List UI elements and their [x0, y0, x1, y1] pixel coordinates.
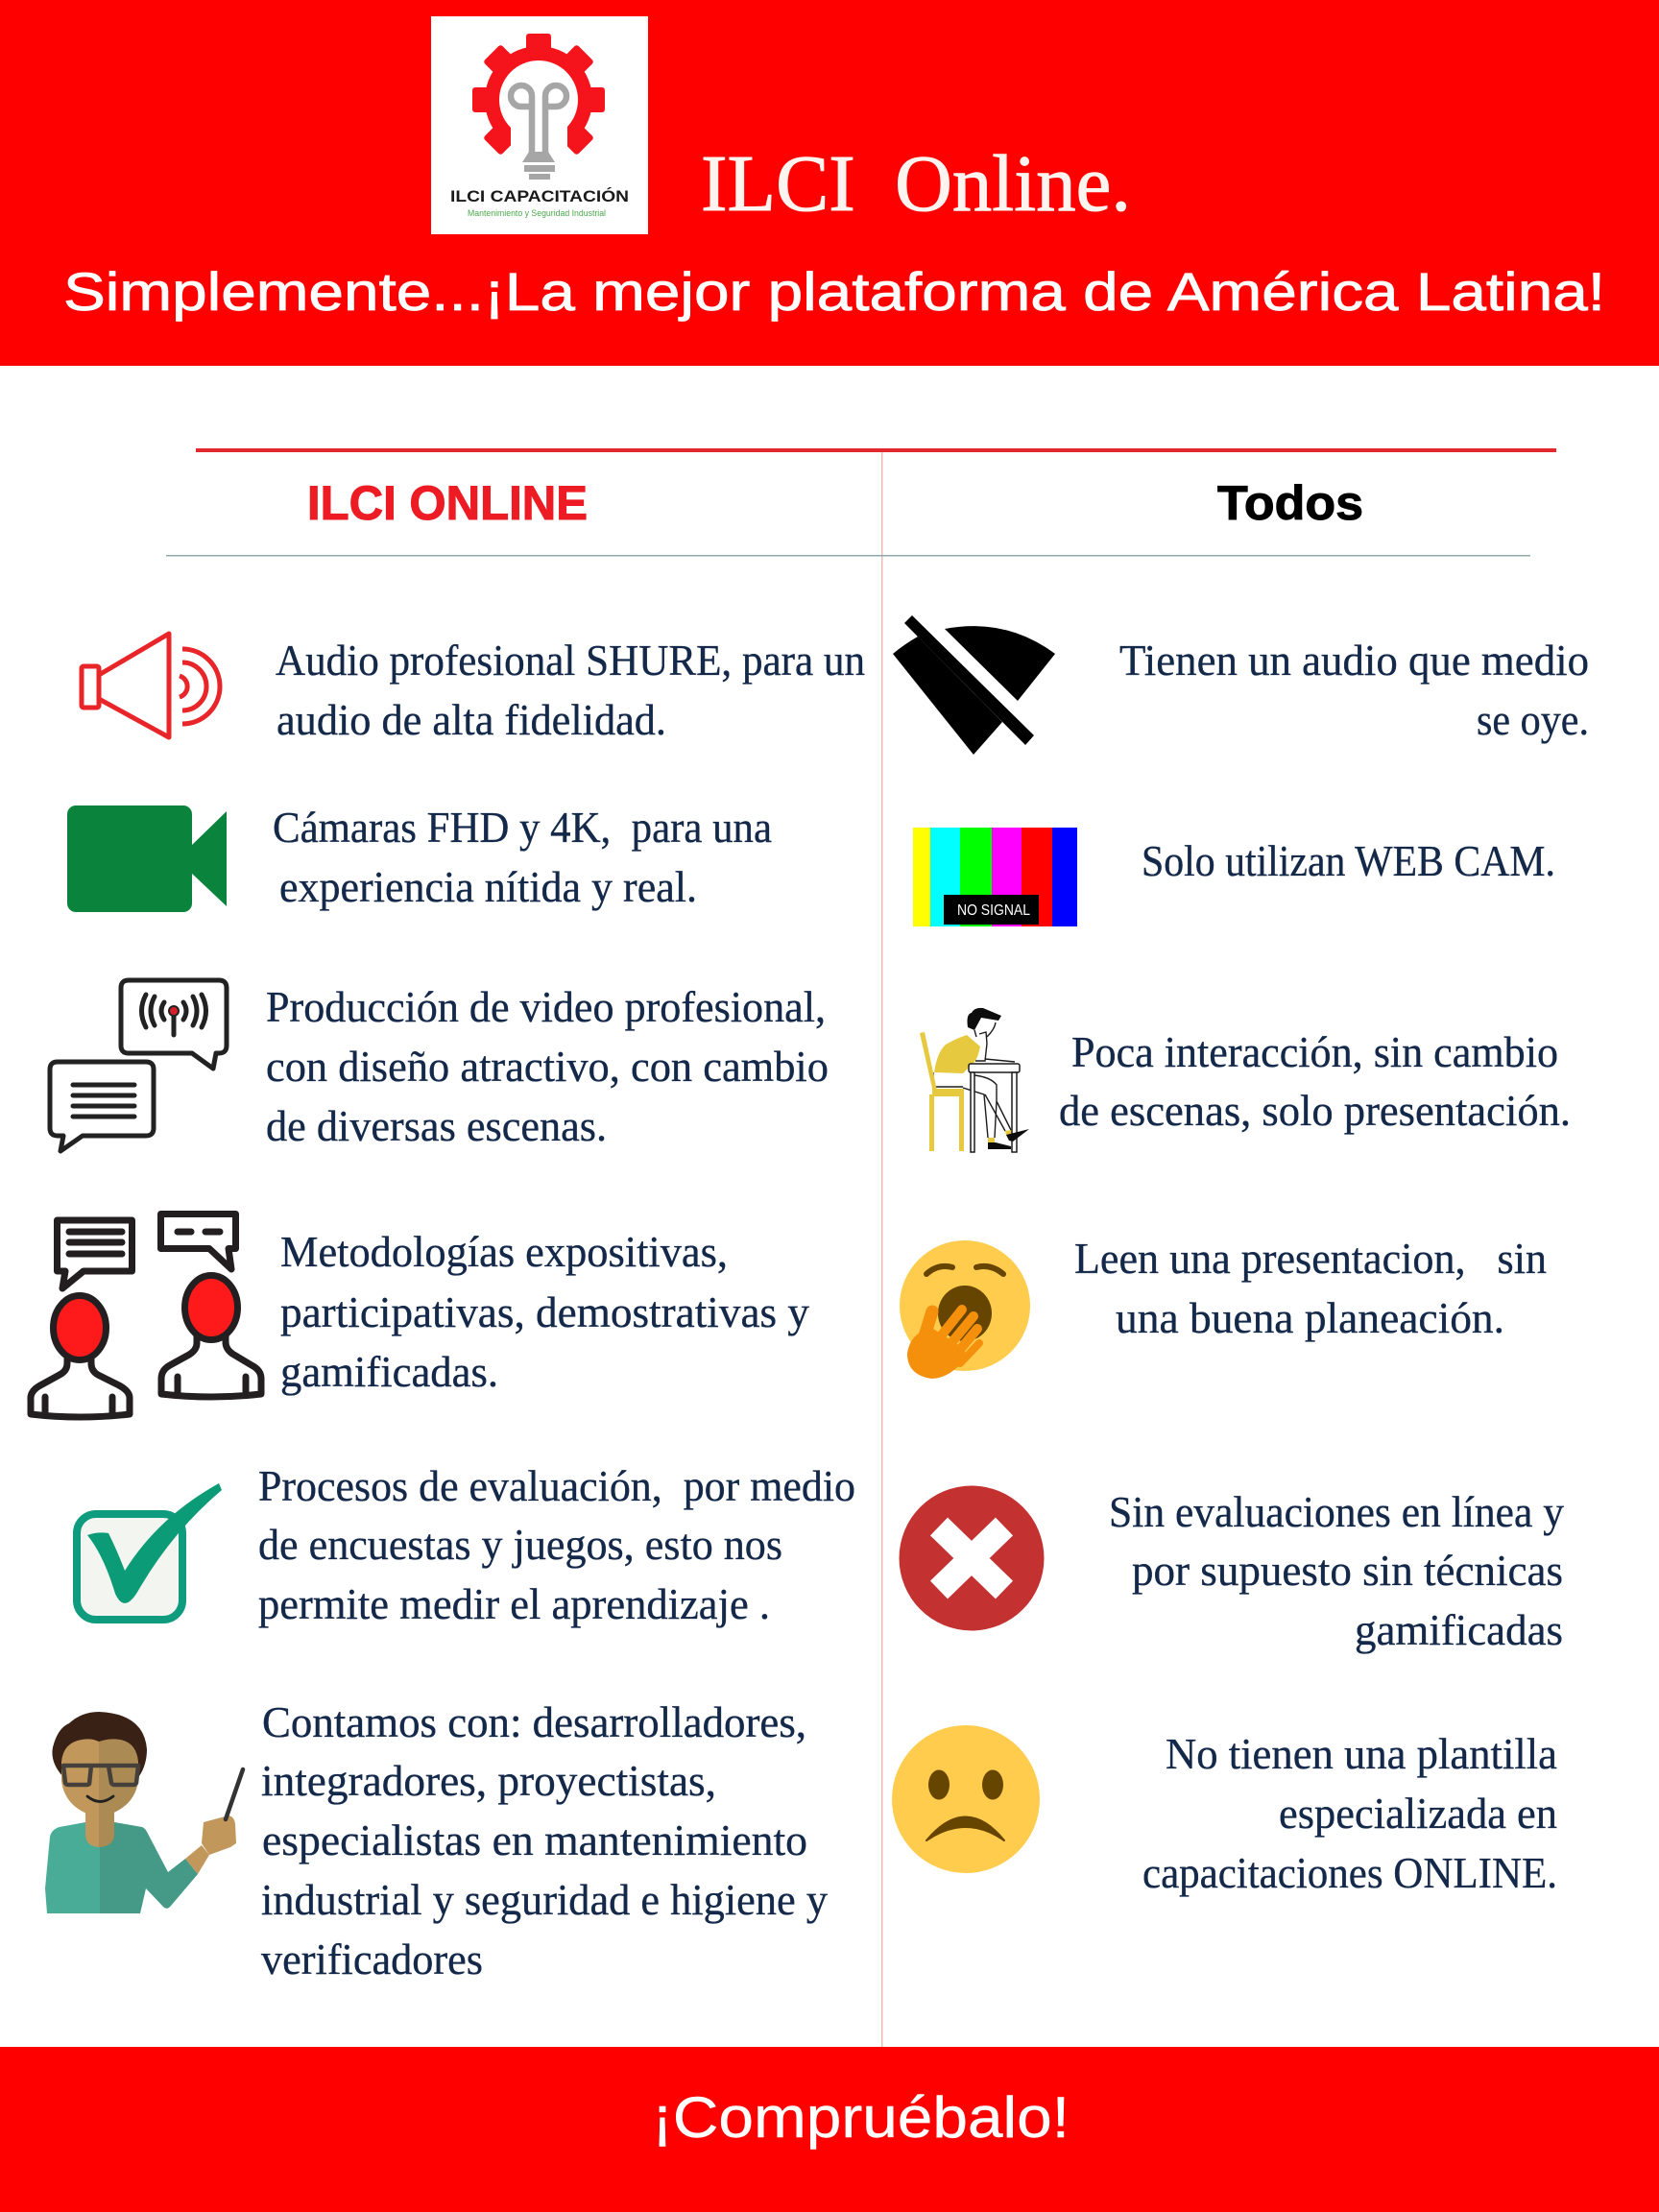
text: procesos de evaluación: de encuestas y juegos, esto nos — [258, 1520, 782, 1569]
text: producción de video: Producción de video profesional, — [266, 982, 826, 1031]
text: contamos con: industrial y seguridad e higiene y — [261, 1875, 828, 1924]
text: sin evaluaciones — [1109, 1487, 1564, 1654]
icon: no signal test card — [913, 828, 1077, 926]
text: no tienen plantilla: especializada en — [1279, 1789, 1557, 1838]
column heading: Todos: Todos — [1217, 476, 1363, 530]
icon: bored man at desk — [920, 1008, 1029, 1152]
text: contamos con: especialistas en mantenimiento — [262, 1815, 807, 1864]
text: procesos de evaluación: permite medir el aprendizaje . — [258, 1579, 770, 1628]
text: audio profesional: audio de alta fidelidad. — [276, 695, 666, 744]
panel: header banner — [0, 0, 1659, 366]
text: procesos de evaluación: Procesos de evaluación, por medio — [258, 1461, 855, 1510]
text: solo utilizan web cam: Solo utilizan WEB CAM. — [1142, 836, 1555, 885]
icon: red cross circle — [899, 1486, 1045, 1630]
text: no tienen plantilla — [1142, 1729, 1557, 1897]
icon: teacher with pointer — [45, 1712, 243, 1913]
text: procesos de evaluación — [258, 1461, 855, 1628]
text: contamos con — [261, 1697, 828, 1984]
logo: ILCI Capacitación: Mantenimiento y Seguridad Industrial — [468, 208, 606, 219]
text: metodologías: participativas, demostrativas y — [280, 1287, 809, 1336]
subtitle: Simplemente...¡La mejor plataforma de América Latina! — [63, 261, 1605, 322]
text: poca interacción: Poca interacción, sin cambio — [1071, 1027, 1558, 1076]
text: tienen un audio — [1119, 636, 1589, 744]
text: leen una presentacion: una buena planeación. — [1116, 1293, 1504, 1342]
icon: speaker — [82, 634, 220, 737]
text: producción de video: con diseño atractivo, con cambio — [266, 1042, 829, 1091]
text: contamos con: integradores, proyectistas, — [261, 1756, 716, 1805]
icon: two people talking — [31, 1214, 261, 1417]
text: contamos con: verificadores — [261, 1935, 483, 1984]
footer call to action: ¡Compruébalo! — [652, 2085, 1070, 2150]
text: contamos con: Contamos con: desarrolladores, — [262, 1697, 806, 1746]
text: producción de video — [266, 982, 829, 1150]
icon: video camera — [67, 805, 227, 912]
text: cámaras — [273, 803, 772, 911]
text: leen una presentacion — [1074, 1234, 1547, 1342]
table rules — [166, 448, 1556, 2048]
text: metodologías — [280, 1227, 809, 1396]
text: tienen un audio: se oye. — [1477, 695, 1589, 744]
text: audio profesional: Audio profesional SHURE, para un — [276, 636, 865, 685]
text: sin evaluaciones: por supuesto sin técnicas — [1132, 1546, 1563, 1595]
title: ILCI Online. — [701, 139, 1131, 228]
text: audio profesional — [276, 636, 865, 744]
logo: ILCI Capacitación: ILCI CAPACITACIÓN — [450, 187, 629, 205]
text: tienen un audio: Tienen un audio que medio — [1119, 636, 1589, 685]
logo: ILCI Capacitación — [431, 16, 648, 234]
text: cámaras: Cámaras FHD y 4K, para una — [273, 803, 772, 852]
text: sin evaluaciones: gamificadas — [1355, 1605, 1563, 1654]
icon: yawning face — [900, 1240, 1030, 1379]
icon: no signal test card: NO SIGNAL — [957, 902, 1030, 919]
column heading: ILCI ONLINE: ILCI ONLINE — [307, 476, 588, 530]
icon: check box — [77, 1483, 222, 1620]
text: metodologías: Metodologías expositivas, — [280, 1227, 728, 1276]
icon: signal off — [893, 615, 1055, 755]
text: producción de video: de diversas escenas. — [266, 1101, 607, 1150]
panel: footer banner — [0, 2047, 1659, 2212]
text: cámaras: experiencia nítida y real. — [279, 862, 697, 911]
icon: chat bubbles with antenna — [50, 980, 227, 1151]
text: leen una presentacion: Leen una presentacion, sin — [1074, 1234, 1547, 1283]
text: poca interacción — [1059, 1027, 1571, 1135]
text: sin evaluaciones: Sin evaluaciones en línea y — [1109, 1487, 1564, 1536]
icon: sad face — [892, 1725, 1040, 1873]
text: poca interacción: de escenas, solo presentación. — [1059, 1086, 1571, 1135]
text: no tienen plantilla: capacitaciones ONLINE. — [1142, 1848, 1557, 1897]
text: no tienen plantilla: No tienen una plantilla — [1166, 1729, 1557, 1778]
text: metodologías: gamificadas. — [280, 1347, 498, 1396]
